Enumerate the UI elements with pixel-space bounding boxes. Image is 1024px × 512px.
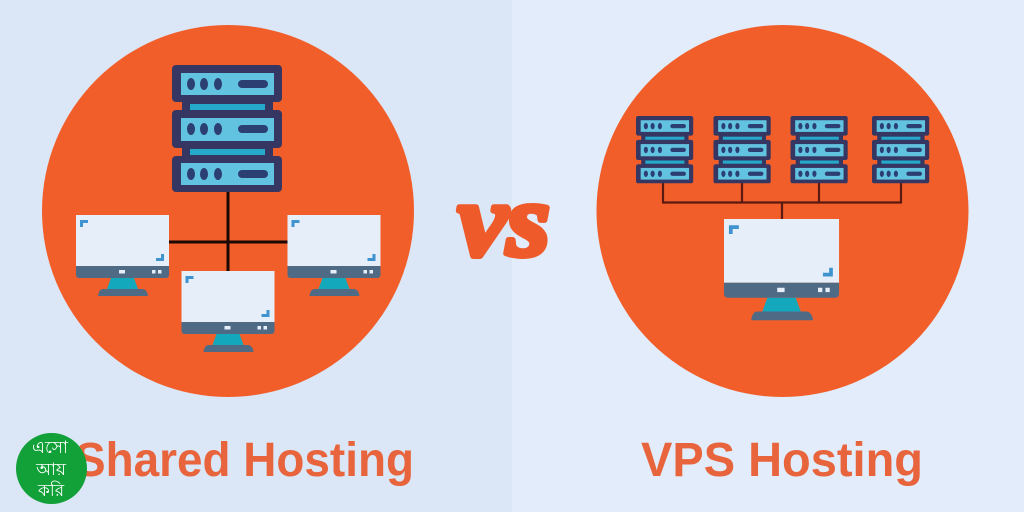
icon: bottom monitor <box>182 271 274 352</box>
badge: green logo: করি <box>37 480 65 500</box>
icon: VPS server rack 2 <box>714 116 771 183</box>
icon: left monitor <box>76 215 169 296</box>
panel: VPS hosting diagram <box>596 25 968 397</box>
orange circle: VPS hosting <box>596 25 968 397</box>
icon: VPS server rack 4 <box>872 116 929 183</box>
icon: VPS server rack 3 <box>790 116 848 183</box>
connector lines: shared server to monitors <box>169 192 288 271</box>
connector lines: VPS servers to monitor <box>662 183 902 220</box>
vs label: vs <box>458 163 550 278</box>
heading: Shared Hosting: Shared Hosting <box>75 434 414 487</box>
orange circle: shared hosting <box>42 25 414 397</box>
icon: right monitor <box>288 215 380 296</box>
badge: green logo: এসো <box>32 438 69 457</box>
icon: VPS monitor <box>724 219 839 320</box>
panel: shared hosting diagram <box>42 25 414 397</box>
icon: shared server rack <box>172 65 282 192</box>
icon: VPS server rack 1 <box>636 116 693 183</box>
heading: VPS Hosting: VPS Hosting <box>641 434 923 487</box>
badge: green logo: আয় <box>35 460 67 479</box>
badge: green logo <box>16 433 87 504</box>
